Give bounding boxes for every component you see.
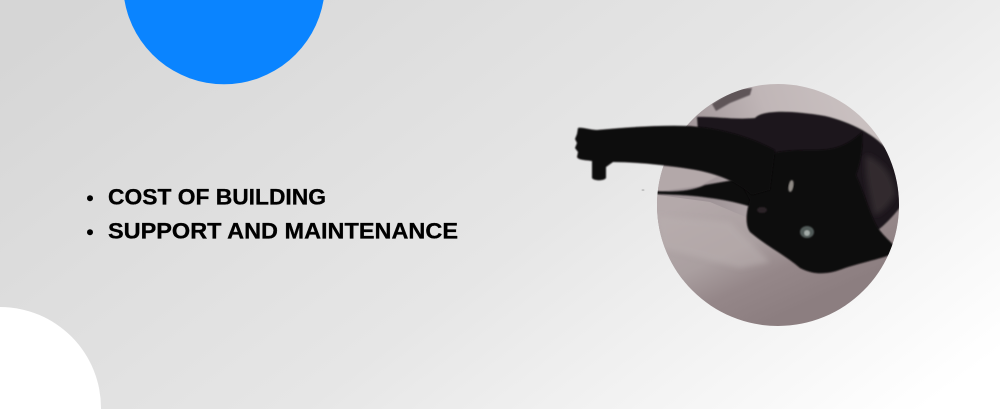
cat eye lower [800,226,814,238]
cat nose [757,207,767,213]
cat eye upper [787,180,795,192]
shadow beneath arm [658,180,751,207]
blanket [650,194,905,330]
blanket texture [703,236,766,268]
cat photo: black cat giving thumbs down [575,80,905,330]
bullet item: support and maintenance: SUPPORT AND MAINTENANCE [108,218,458,244]
stray speck [642,189,644,191]
pillow [658,166,716,192]
circular photo background [650,80,905,330]
bullet list [87,184,458,244]
cat arm and paw pointing down [575,126,775,195]
decorative white circle [0,307,101,409]
lighter back patch [866,155,895,215]
dark body [697,112,902,235]
cat head [740,132,897,273]
wall lettering [712,88,752,111]
bullet item: cost of building: COST OF BUILDING [108,184,326,210]
decorative blue circle [124,0,324,84]
